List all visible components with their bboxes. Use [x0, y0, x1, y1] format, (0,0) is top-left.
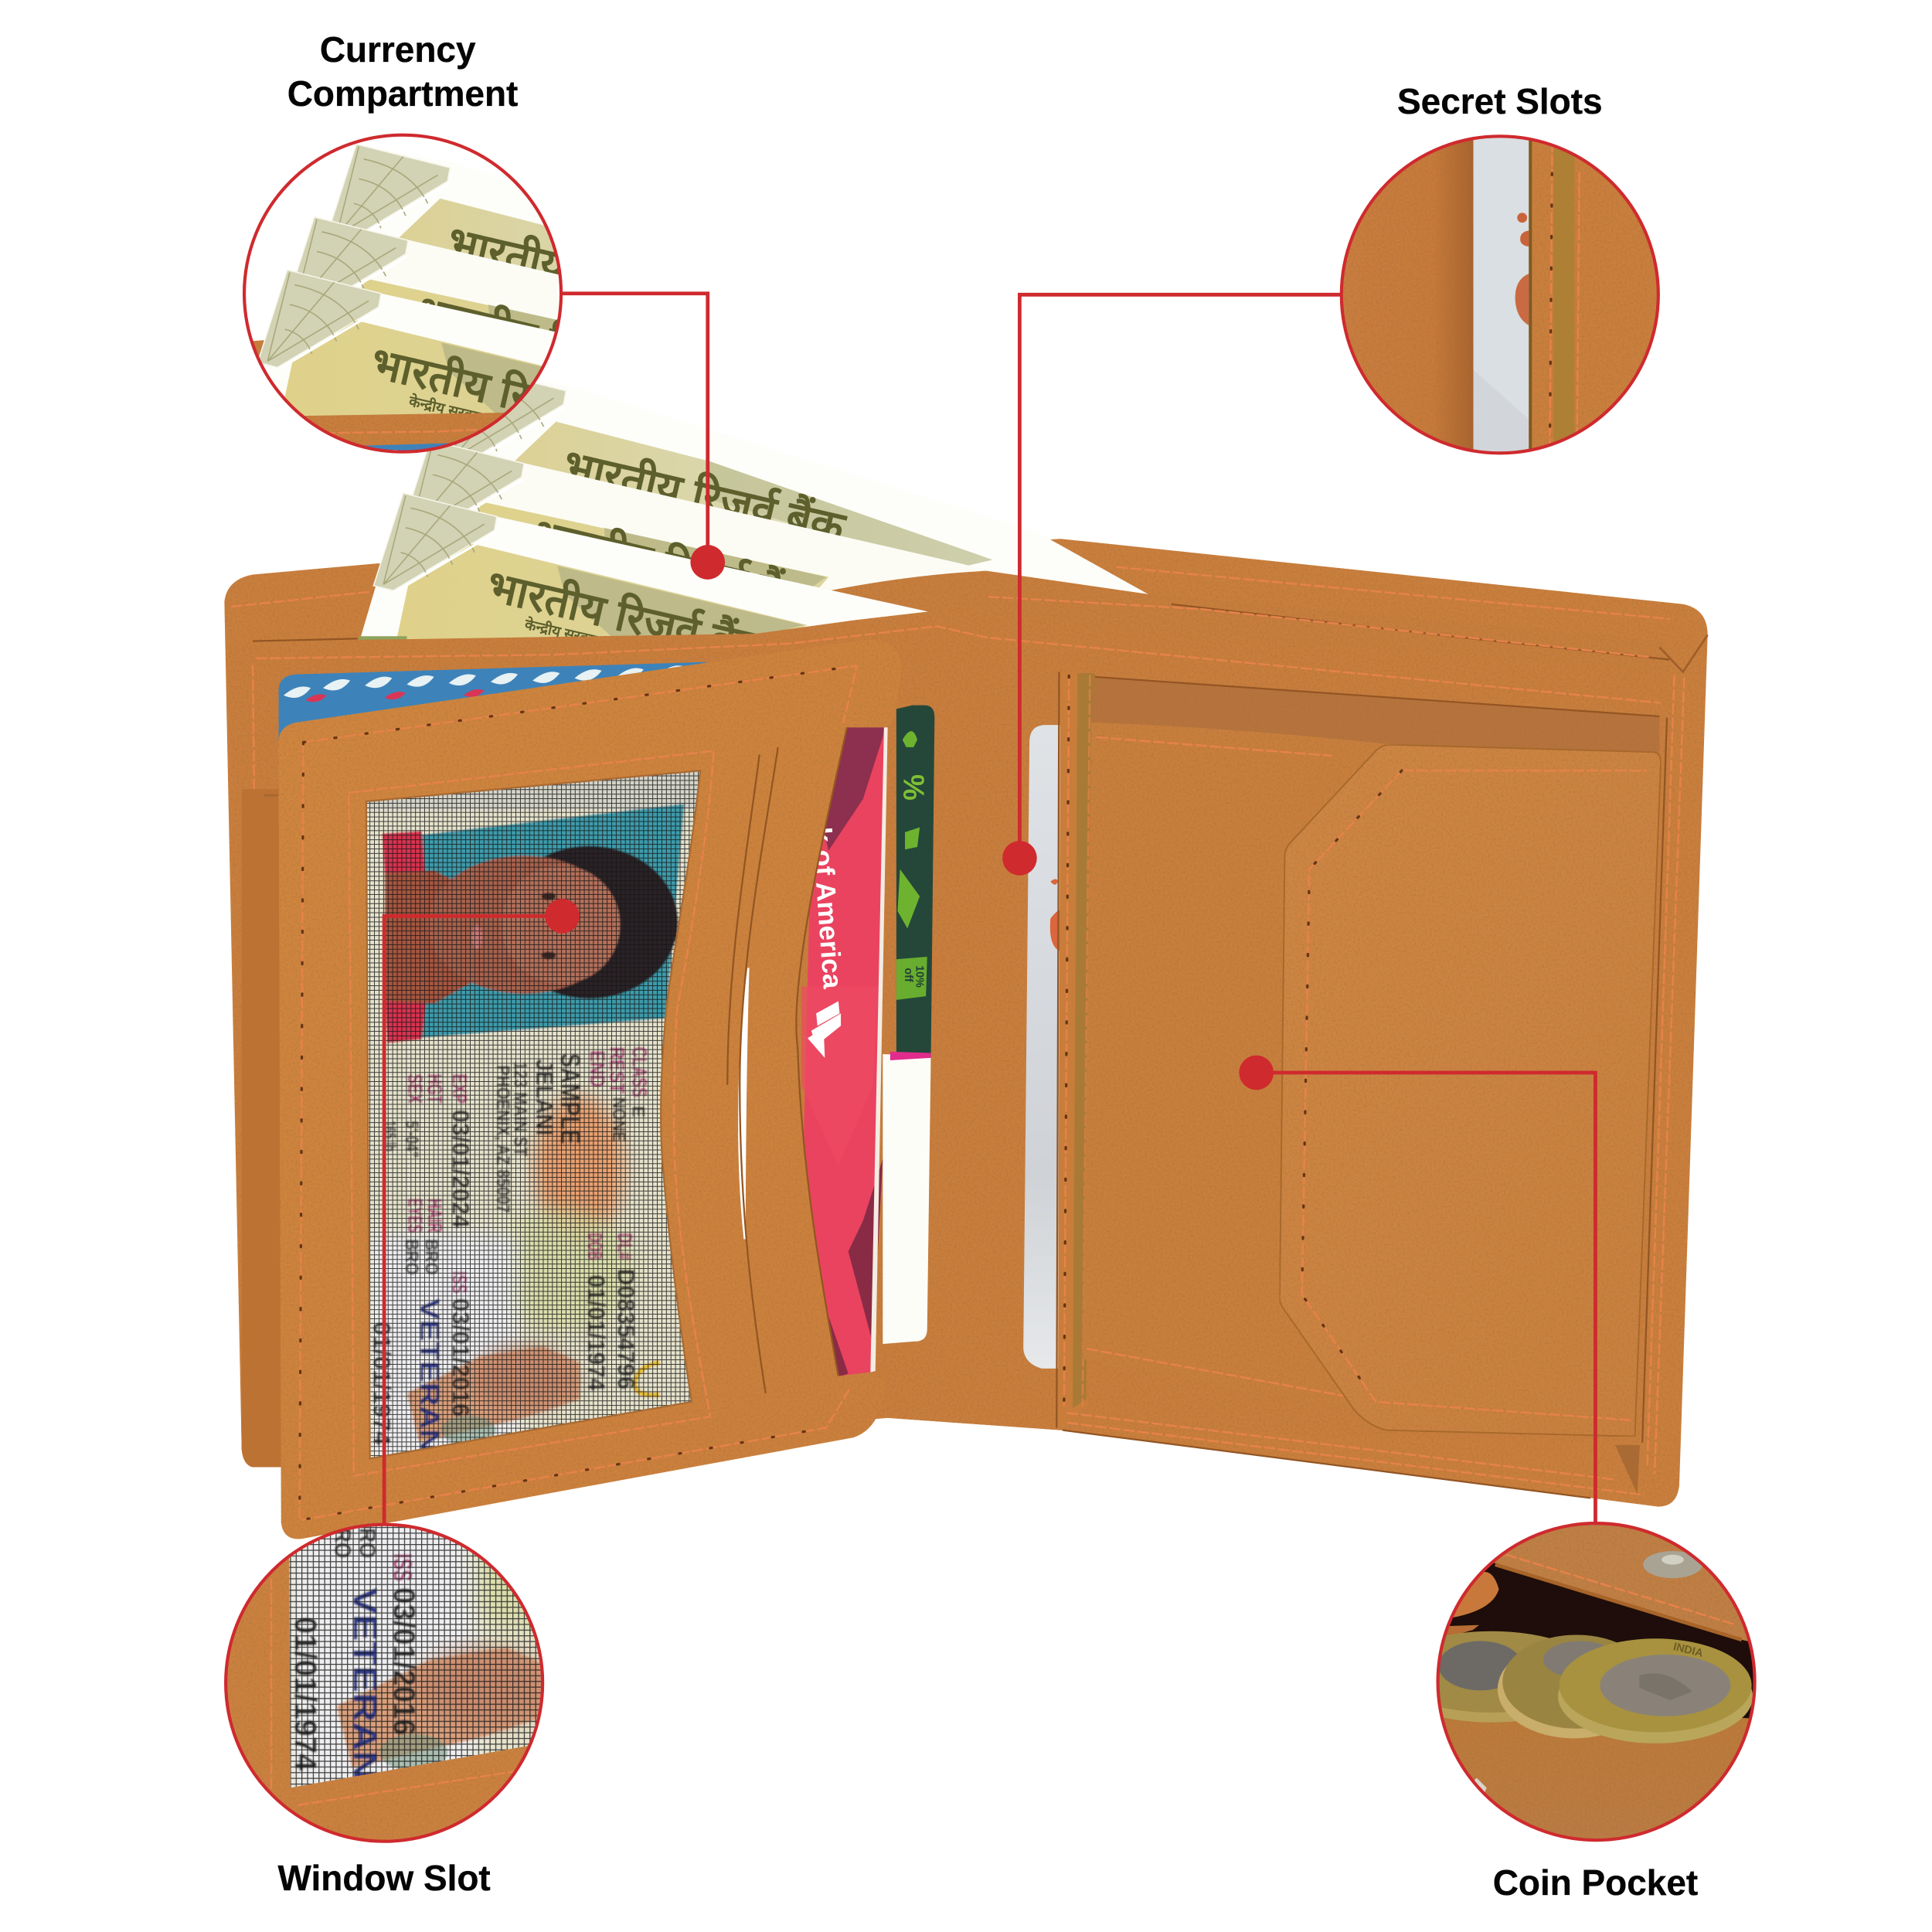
- leader line: coin pocket: [1257, 1073, 1595, 1524]
- zoom circle: coin pocket with coins: [1436, 1522, 1757, 1842]
- callout: secret slots: [1002, 81, 1677, 876]
- zoom circle: ID window mesh: [224, 1522, 544, 1843]
- leader line: currency compartment: [561, 294, 708, 563]
- callout: window slot: [224, 899, 580, 1891]
- leader line: secret slots: [1019, 294, 1342, 858]
- heading: currency compartment: Currency: [320, 29, 476, 70]
- heading: window slot: Window Slot: [278, 1858, 491, 1898]
- wallet photo: [224, 367, 1708, 1539]
- leader line: window slot: [384, 916, 563, 1524]
- dot: window slot: [545, 899, 580, 934]
- dot: currency compartment: [690, 545, 725, 580]
- heading: secret slots: Secret Slots: [1397, 81, 1603, 121]
- heading: currency compartment: Compartment: [287, 73, 518, 114]
- zoom circle: secret card slot: [1340, 134, 1660, 454]
- heading: coin pocket: Coin Pocket: [1493, 1862, 1698, 1903]
- callout: currency compartment: [243, 36, 725, 580]
- zoom circle: coin pocket with coins: INDIA: [1672, 1641, 1704, 1660]
- dot: coin pocket: [1239, 1056, 1274, 1090]
- zoom circle: currency notes: [243, 133, 563, 454]
- callout: coin pocket: [1239, 1056, 1763, 1903]
- dot: secret slots: [1002, 841, 1037, 876]
